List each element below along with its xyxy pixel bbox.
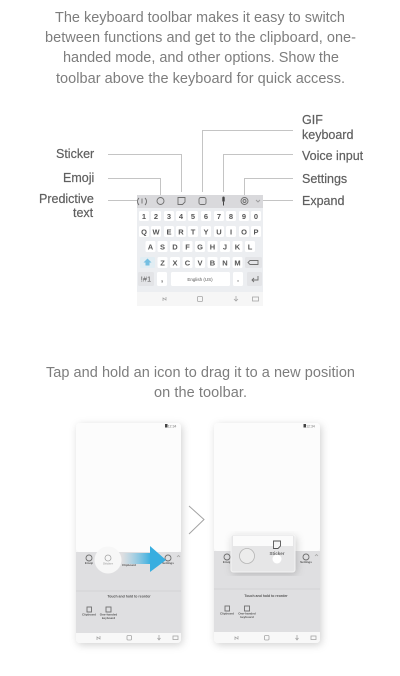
bottom row: English (US) (187, 277, 213, 282)
keyboard: J (223, 242, 227, 251)
keyboard: S (160, 242, 165, 251)
keyboard: 2 (154, 212, 158, 221)
keyboard: Z (160, 258, 165, 267)
blue drag arrow (122, 546, 166, 572)
clipboard option (82, 607, 96, 616)
keyboard: W (152, 227, 160, 236)
toolbar settings panel (76, 552, 181, 633)
keyboard: 7 (217, 212, 221, 221)
one-handed option: keyboard (240, 615, 254, 619)
navigation bar (137, 292, 263, 306)
second instruction: on the toolbar. (154, 385, 247, 401)
left phone screen (76, 423, 181, 643)
keyboard: C (185, 258, 191, 267)
keyboard: I (230, 227, 232, 236)
settings icon: Settings (162, 561, 174, 565)
one-handed option: One-handed (100, 612, 117, 616)
QWERTY row (139, 226, 261, 237)
clipboard option: Clipboard (220, 612, 234, 616)
callout labels: keyboard (302, 128, 353, 142)
keyboard: 0 (254, 212, 258, 221)
keyboard: U (216, 227, 222, 236)
keyboard: P (253, 227, 259, 236)
status bar: 12:34 (306, 424, 315, 428)
clipboard label behind arrow: Clipboard (122, 563, 136, 567)
keyboard: M (234, 258, 241, 267)
keyboard: T (191, 227, 196, 236)
keyboard: B (210, 258, 216, 267)
keyboard: H (210, 242, 215, 251)
keyboard: 5 (191, 212, 195, 221)
chevron arrow (189, 506, 204, 534)
callout labels: Sticker (56, 147, 94, 161)
one-handed option (238, 606, 256, 619)
keyboard: 8 (229, 212, 233, 221)
held sticker circle: Sticker (103, 562, 114, 566)
emoji icon: Emoji (223, 560, 231, 564)
keyboard: Q (141, 227, 147, 236)
bottom row: !#1 (141, 274, 151, 284)
sticker label: Sticker (269, 551, 285, 556)
emoji icon (85, 555, 93, 565)
ASDF row (146, 241, 255, 252)
callout labels: Predictive (39, 192, 94, 206)
keyboard: D (172, 242, 178, 251)
toolbar (137, 195, 263, 208)
navigation bar (97, 635, 178, 640)
reorder hint: Touch and hold to reorder (244, 594, 288, 598)
keyboard: 6 (204, 212, 208, 221)
clipboard option (220, 606, 234, 616)
callout labels: text (73, 206, 94, 220)
ZXCV row (158, 257, 242, 268)
emoji icon: Emoji (85, 561, 93, 565)
sticker icon (274, 541, 280, 548)
status bar (165, 424, 176, 428)
callout leader lines (108, 130, 293, 200)
keyboard: X (172, 258, 178, 267)
intro paragraph (45, 10, 356, 87)
callout labels: Expand (302, 194, 344, 208)
callout labels: Emoji (63, 171, 94, 185)
keyboard diagram (39, 113, 364, 306)
keyboard: 9 (242, 212, 246, 221)
one-handed option: keyboard (102, 616, 115, 620)
drag popup (231, 535, 295, 572)
keyboard: O (241, 227, 247, 236)
keyboard: L (248, 242, 253, 251)
callout labels: GIF (302, 113, 323, 127)
intro paragraph: toolbar above the keyboard for quick access. (56, 71, 345, 87)
bottom row: , (161, 274, 163, 284)
one-handed option (100, 607, 117, 620)
callout labels (39, 113, 364, 220)
toolbar settings panel (214, 551, 320, 632)
keyboard: E (166, 227, 172, 236)
settings icon (300, 554, 318, 564)
intro paragraph: between functions and get to the clipboard, one- (45, 30, 356, 46)
keyboard: G (197, 242, 203, 251)
reorder hint: Touch and hold to reorder (107, 594, 151, 598)
keyboard: V (197, 258, 203, 267)
right phone screen (214, 423, 320, 643)
keyboard: N (222, 258, 228, 267)
keyboard: 1 (142, 212, 146, 221)
emoji icon (223, 554, 231, 564)
keyboard: Y (203, 227, 209, 236)
keyboard: F (185, 242, 190, 251)
keyboard: A (148, 242, 154, 251)
bottom row: . (237, 274, 239, 284)
keyboard: 3 (167, 212, 171, 221)
second instruction: Tap and hold an icon to drag it to a new position (46, 365, 355, 381)
keyboard: 4 (179, 212, 184, 221)
settings icon: Settings (300, 560, 312, 564)
bottom row (138, 272, 262, 286)
status bar: 12:34 (168, 424, 176, 428)
callout labels: Settings (302, 172, 347, 186)
keyboard (137, 195, 263, 306)
navigation bar (235, 635, 316, 640)
settings icon (162, 555, 180, 565)
keyboard: K (235, 242, 241, 251)
status bar (304, 424, 315, 428)
intro paragraph: The keyboard toolbar makes it easy to switch (55, 10, 345, 26)
one-handed option: One-handed (238, 612, 256, 616)
number row (139, 211, 261, 221)
held sticker circle (94, 546, 122, 574)
second instruction (46, 365, 355, 401)
callout labels: Voice input (302, 149, 364, 163)
keyboard: R (178, 227, 184, 236)
backspace key (245, 257, 262, 268)
shift key (140, 257, 155, 268)
intro paragraph: handed mode, and other options. Show the (63, 50, 339, 66)
clipboard option: Clipboard (82, 612, 96, 616)
